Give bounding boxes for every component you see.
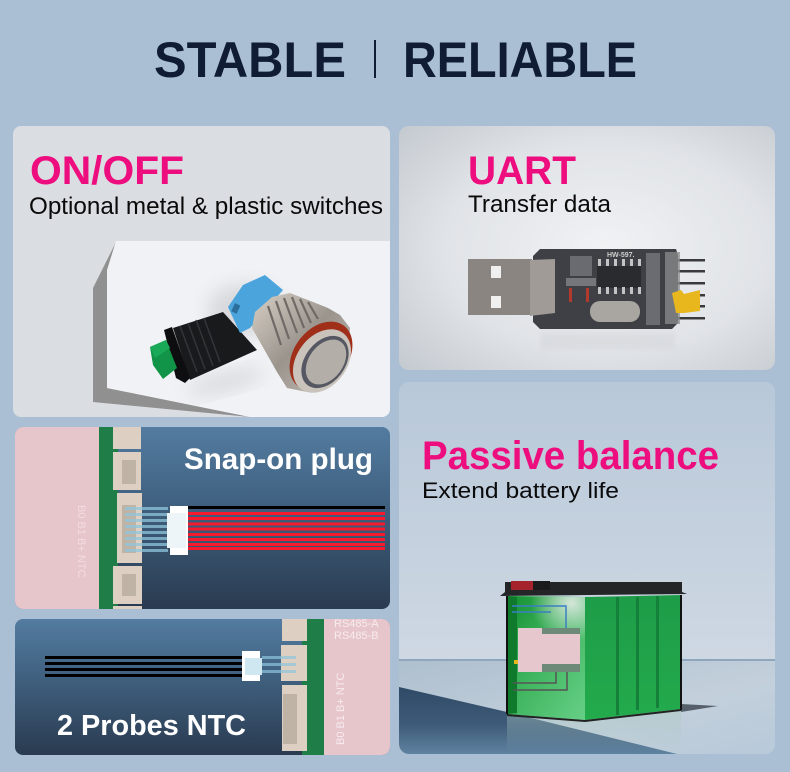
grey wires [513,672,567,690]
flange and red ring [277,309,365,403]
connector [167,506,188,555]
panel: 2 probes NTC: RS485-B [334,630,379,642]
chip [597,266,641,288]
heading: Snap-on plug [184,443,373,476]
wires [188,506,385,550]
panel: snap-on plug: B0 B1 B+ NTC [75,505,87,578]
metal threaded body [252,293,350,392]
panel: 2 probes NTC [15,618,390,755]
icon: battery [500,581,687,722]
BMS board [518,628,580,672]
panel: UART [399,126,775,370]
heading: ON/OFF: ON/OFF [30,149,184,193]
icon: USB board [468,249,705,350]
casing [507,596,585,720]
subheading: Optional metal & plastic switches [29,193,383,220]
crystal [590,301,640,322]
title [154,32,637,88]
heading: 2 Probes NTC [57,710,246,742]
heading: Passive balance [422,434,719,478]
heading: UART: UART [468,149,576,193]
wires [45,656,242,677]
connector [242,651,262,681]
panel: snap-on plug [15,427,390,610]
illuminated ring and face [292,327,358,397]
panel: passive balance [399,382,775,754]
green button [150,340,177,379]
panel: 2 probes NTC: B0 B1 B+ NTC [335,672,347,745]
board label: HW-597. [607,252,635,259]
subheading: Transfer data [468,191,612,218]
blue wires [512,606,566,628]
subheading: Extend battery life [422,478,619,503]
pins [670,259,705,320]
title: STABLE [154,32,346,88]
title: RELIABLE [403,32,637,88]
lid [500,582,687,596]
black plastic switch [173,312,257,380]
panel: on/off switches [13,126,390,417]
jumper [672,290,700,313]
display stand [93,241,390,417]
blue connector [228,275,283,333]
USB plug [468,259,532,315]
PCB [533,249,678,329]
panel: 2 probes NTC: RS485-A [334,618,379,630]
icon: switches [150,275,365,404]
